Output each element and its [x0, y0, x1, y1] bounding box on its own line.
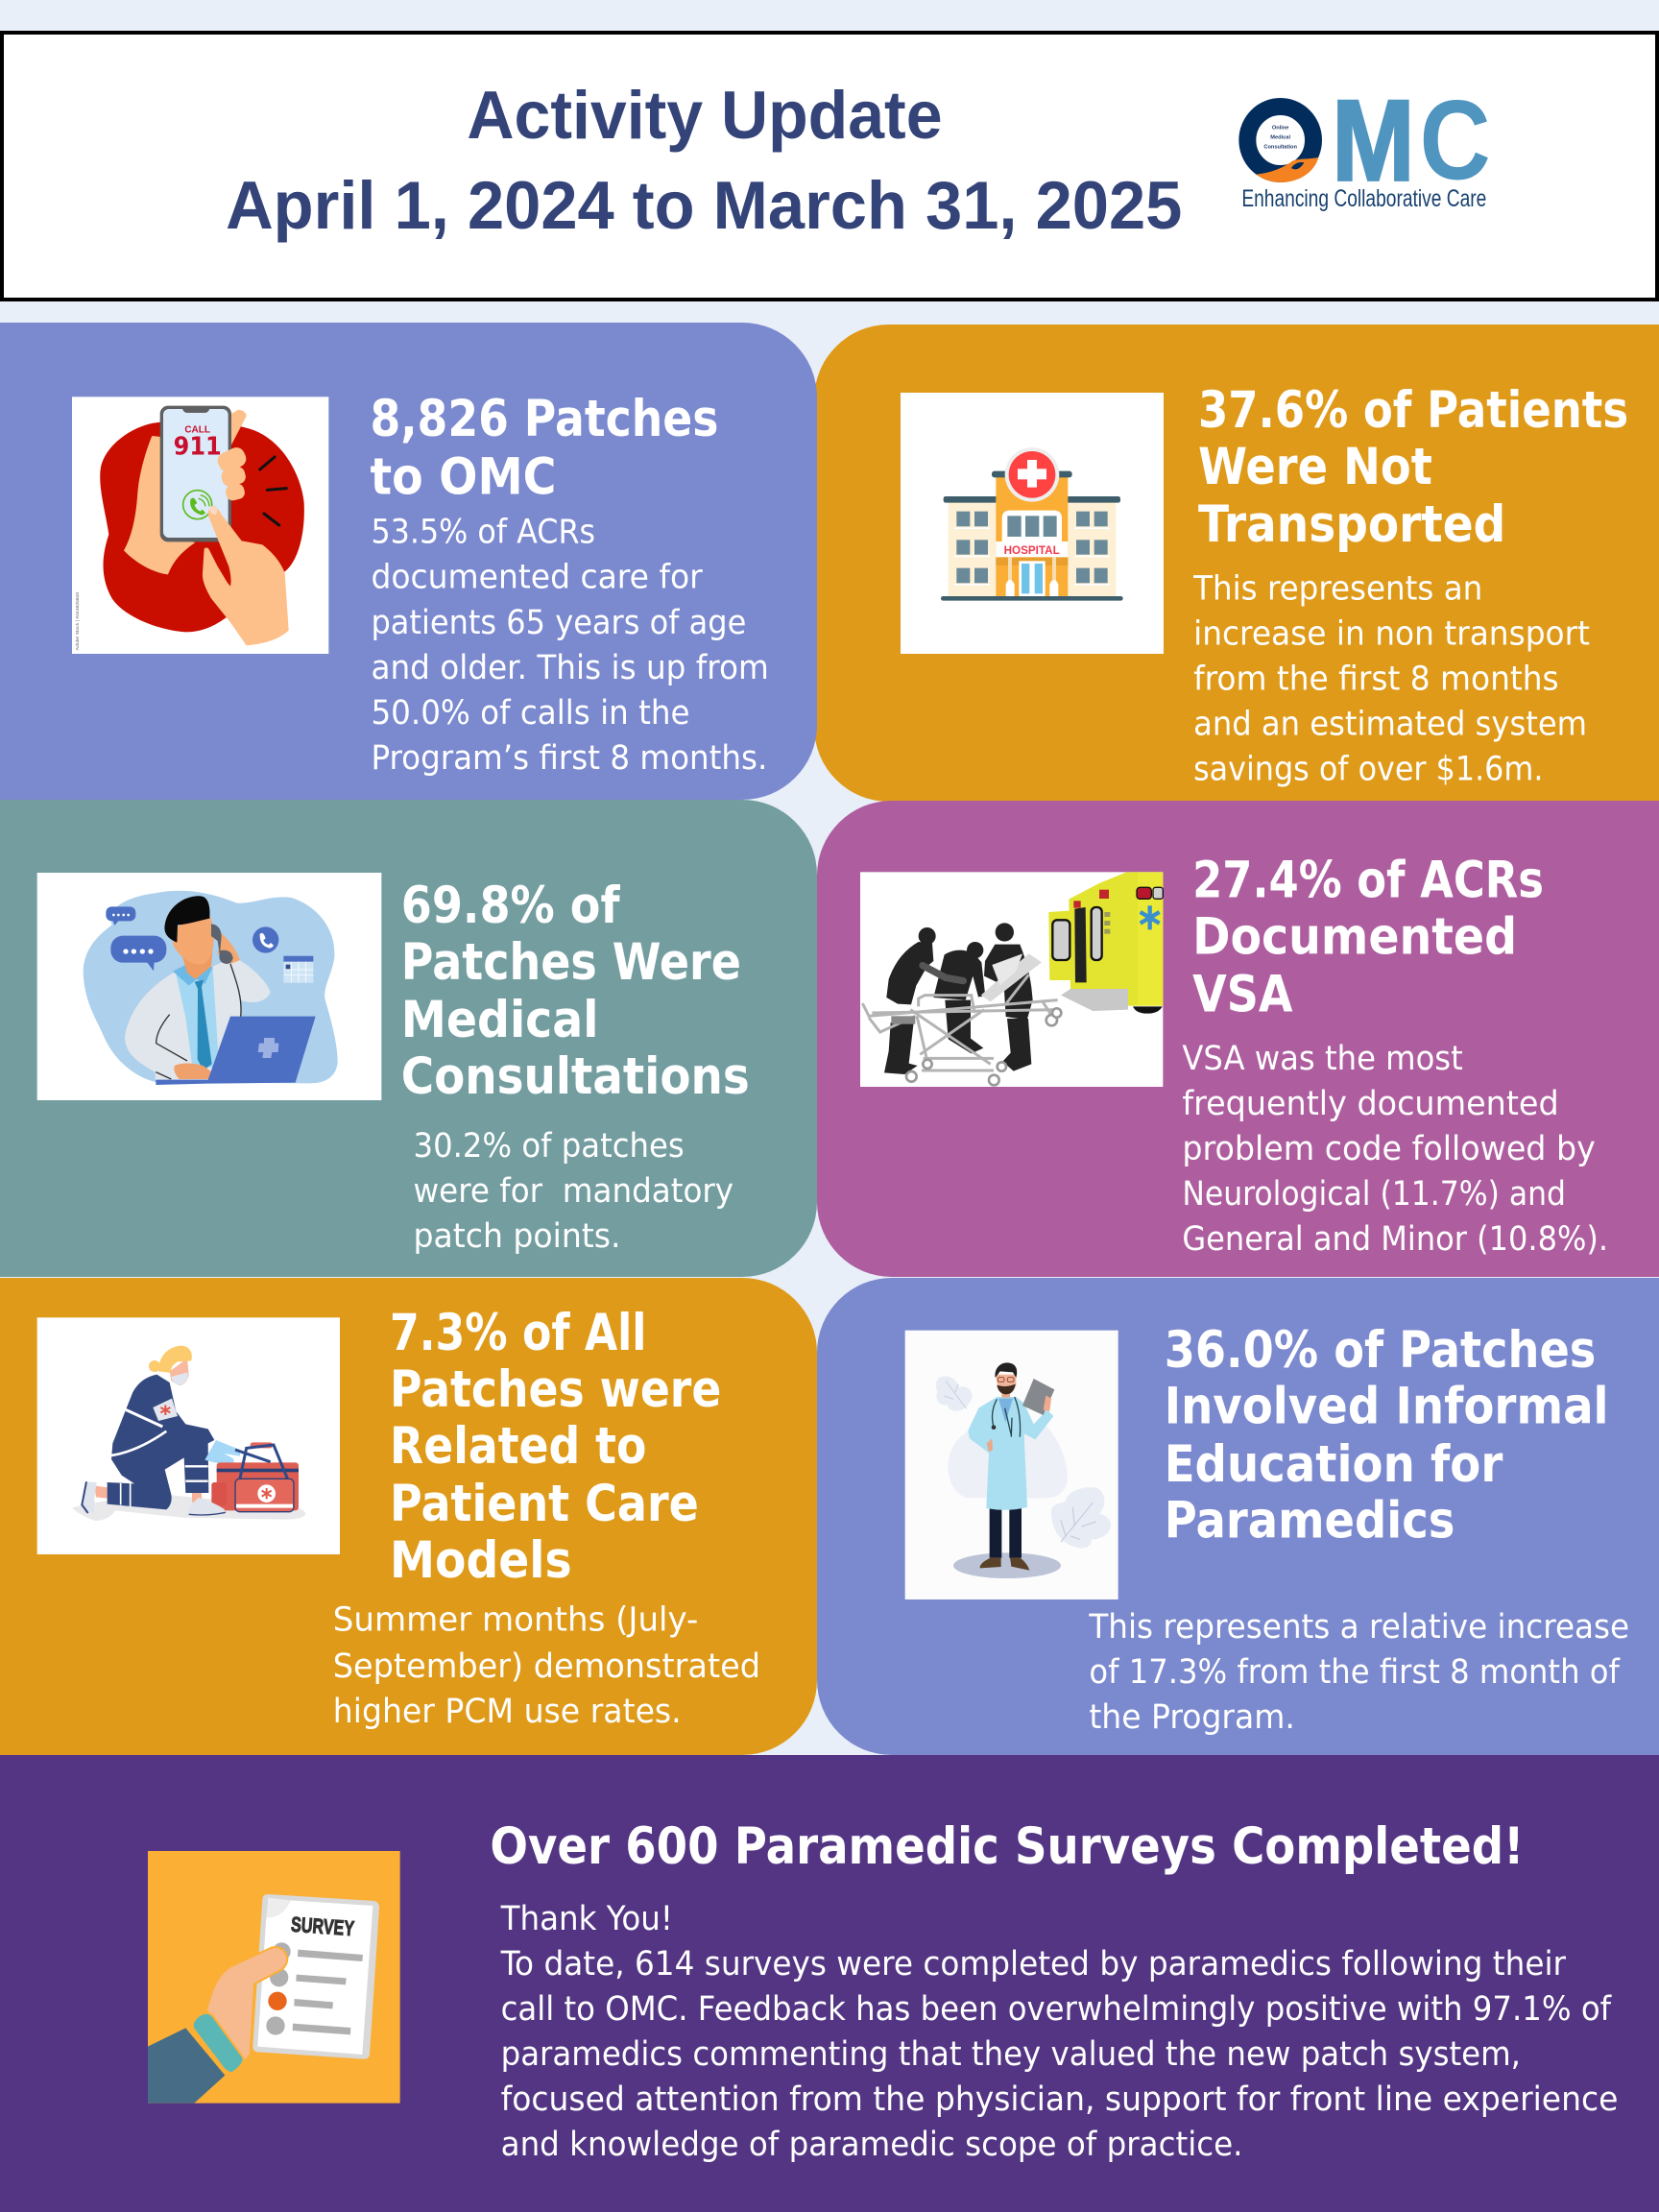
body text [1182, 1040, 1608, 1259]
body text: 50.0% of calls in the [371, 694, 690, 733]
heading [1165, 1321, 1609, 1551]
body text: patients 65 years of age [371, 604, 746, 642]
icon: physician on phone with laptop [37, 873, 381, 1100]
body text: of 17.3% from the first 8 month of [1089, 1653, 1621, 1692]
body text: documented care for [371, 559, 704, 597]
panel background [817, 801, 1659, 1277]
icon: hand holding survey [148, 1851, 400, 2104]
heading: 36.0% of Patches [1165, 1321, 1596, 1380]
heading: Involved Informal [1165, 1378, 1609, 1436]
body text: This represents a relative increase [1088, 1608, 1629, 1647]
heading: 7.3% of All [390, 1304, 646, 1362]
body text [371, 514, 769, 778]
body text: increase in non transport [1193, 615, 1590, 654]
title [226, 77, 1182, 243]
heading: Were Not [1198, 438, 1432, 496]
logo: OMC: Consultation [1263, 145, 1297, 151]
heading: Education for [1165, 1435, 1503, 1494]
panel background [814, 325, 1659, 802]
header frame [2, 33, 1657, 300]
logo: OMC: Online [1272, 126, 1288, 132]
panel: medical consultations [0, 800, 817, 1277]
panel: patches to OMC [0, 323, 817, 800]
body text [1192, 569, 1590, 789]
body text: paramedics commenting that they valued the new patch system, [501, 2035, 1521, 2074]
icon: hand holding survey: SURVEY [290, 1912, 355, 1940]
body text [500, 1900, 1618, 2164]
logo: OMC: Medical [1270, 135, 1290, 141]
heading: Patient Care [390, 1475, 699, 1533]
heading [370, 390, 718, 506]
icon: doctor with clipboard [905, 1331, 1118, 1599]
heading: Documented [1192, 907, 1517, 966]
icon: paramedics with stretcher and ambulance [860, 872, 1163, 1087]
body text: from the first 8 months [1193, 661, 1559, 699]
heading: 69.8% of [401, 877, 620, 935]
heading [401, 877, 750, 1106]
heading: Consultations [401, 1047, 750, 1106]
panel: informal education [817, 1278, 1659, 1755]
logo: OMC [1241, 76, 1491, 212]
panel background [0, 1755, 1659, 2212]
panel: VSA [817, 801, 1659, 1277]
panel background [0, 323, 817, 800]
panel background [0, 800, 817, 1277]
heading [1198, 381, 1628, 554]
title: April 1, 2024 to March 31, 2025 [226, 167, 1182, 243]
heading: Patches Were [401, 933, 741, 992]
panel: non-transport [814, 325, 1659, 802]
logo: OMC: Enhancing Collaborative Care [1241, 185, 1486, 212]
body text: and older. This is up from [371, 649, 769, 687]
header banner [2, 33, 1657, 300]
heading: Paramedics [1165, 1492, 1455, 1551]
icon: phone calling 911: CALL [184, 424, 210, 435]
body text: Program’s first 8 months. [371, 739, 767, 778]
icon: paramedic with medical bag [37, 1317, 340, 1554]
body text: were for mandatory [414, 1172, 733, 1211]
heading: to OMC [370, 447, 556, 506]
body text: the Program. [1089, 1698, 1295, 1737]
body text: focused attention from the physician, support for front line experience [501, 2080, 1618, 2119]
body text: Summer months (July- [333, 1601, 698, 1640]
body text: and an estimated system [1193, 706, 1587, 744]
body text: Thank You! [500, 1900, 673, 1938]
heading: Transported [1198, 495, 1505, 554]
body text: 30.2% of patches [414, 1127, 685, 1166]
heading [1192, 852, 1544, 1024]
panel: patient care models [0, 1278, 817, 1755]
body text: Neurological (11.7%) and [1182, 1175, 1566, 1214]
icon: phone calling 911: 911 [174, 431, 222, 460]
body text [1088, 1608, 1629, 1737]
body text: This represents an [1192, 569, 1482, 608]
body text: frequently documented [1182, 1085, 1559, 1123]
body text: patch points. [414, 1217, 621, 1256]
panel background [0, 1278, 817, 1755]
body text: To date, 614 surveys were completed by paramedics following their [500, 1945, 1567, 1984]
title: Activity Update [467, 77, 943, 153]
body text: General and Minor (10.8%). [1182, 1220, 1608, 1259]
body text: September) demonstrated [333, 1647, 760, 1686]
body text: higher PCM use rates. [333, 1693, 682, 1731]
body text: call to OMC. Feedback has been overwhelmingly positive with 97.1% of [501, 1990, 1612, 2029]
icon: hospital: HOSPITAL [1004, 544, 1060, 557]
heading: VSA [1192, 966, 1292, 1024]
panel: paramedic surveys [0, 1755, 1659, 2212]
logo: OMC: M [1332, 76, 1414, 204]
icon: phone calling 911 [72, 397, 328, 654]
icon: phone calling 911: Adobe Stock | #444826840 [75, 591, 80, 650]
heading: 8,826 Patches [370, 390, 718, 448]
icon: hospital [901, 393, 1164, 654]
body text: and knowledge of paramedic scope of practice. [501, 2126, 1243, 2164]
body text: problem code followed by [1182, 1130, 1596, 1168]
heading: 27.4% of ACRs [1192, 852, 1544, 910]
heading: Over 600 Paramedic Surveys Completed! [490, 1817, 1524, 1876]
logo: OMC: C [1420, 78, 1491, 204]
heading: Related to [390, 1417, 646, 1476]
heading: Models [390, 1531, 572, 1590]
heading: Medical [401, 991, 598, 1049]
body text [333, 1601, 760, 1731]
body text: 53.5% of ACRs [371, 514, 595, 552]
heading: Patches were [390, 1360, 721, 1419]
panel background [817, 1278, 1659, 1755]
body text [414, 1127, 733, 1256]
body text: savings of over $1.6m. [1193, 751, 1544, 789]
heading [390, 1304, 721, 1590]
body text: VSA was the most [1182, 1040, 1463, 1078]
